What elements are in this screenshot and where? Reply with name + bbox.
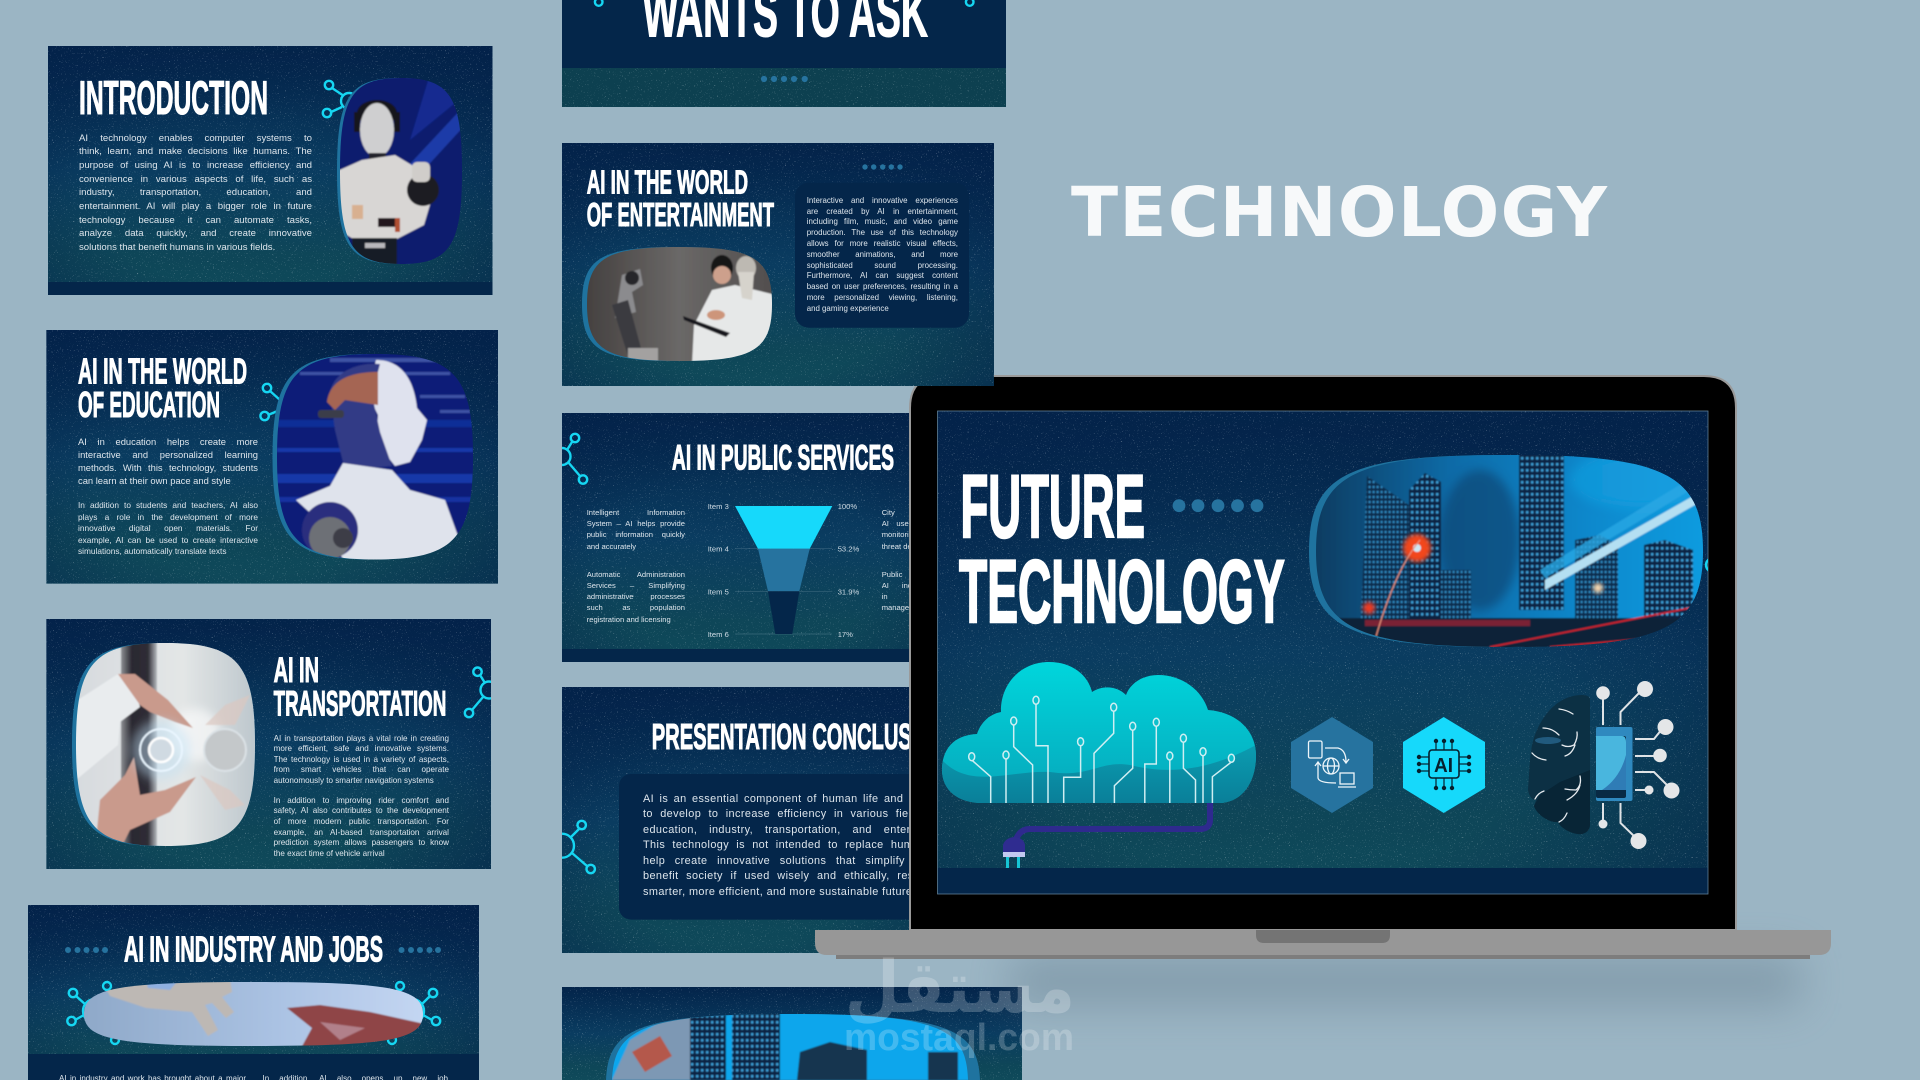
text block: transportation first paragraph: more efficient, safe and innovative systems.	[274, 744, 449, 753]
icon: connector stub	[1704, 558, 1708, 572]
callout: conclusion text box: This technology is not intended to replace humans, but	[643, 839, 959, 851]
heading: AI in transportation: AI IN	[274, 651, 319, 690]
text block: right services: AI used to monitor	[882, 519, 960, 528]
photo: white robot	[340, 78, 462, 264]
photo: robot and human hands	[84, 982, 423, 1046]
callout: entertainment text box: smoother animations, and more	[807, 250, 958, 259]
callout: entertainment text box: are created by AI in entertainment,	[807, 207, 958, 216]
dots: title marker	[1173, 499, 1263, 512]
callout: entertainment text box: more personalized viewing, listening,	[807, 293, 958, 302]
panel: introduction slide	[48, 46, 492, 295]
icon: network devices hexagon	[1291, 717, 1373, 813]
callout: entertainment text box: Interactive and innovative experiences	[807, 196, 958, 205]
text block: transportation first paragraph: AI in transportation plays a vital role in creating	[274, 734, 449, 743]
callout: conclusion text box: smarter, more efficient, and more sustainable future.	[643, 886, 916, 898]
callout: conclusion text box: AI is an essential component of human life and continues	[643, 793, 959, 805]
text block: right services: threat detection	[882, 542, 934, 551]
text block: left services: registration and licensing	[587, 615, 671, 624]
icon: left connector	[67, 982, 119, 1044]
icon: right connector	[388, 982, 440, 1044]
text block: right services: City Security –	[882, 508, 960, 517]
text block: education first paragraph: interactive and personalized learning	[78, 449, 258, 460]
text block: introduction body: analyze data quickly, and create innovative	[79, 228, 312, 239]
text block: left services: such as population	[587, 603, 685, 612]
text block: introduction body: AI technology enables computer systems to	[79, 133, 312, 144]
callout: conclusion text box: help create innovative solutions that simplify life and	[643, 855, 959, 867]
text block: education first paragraph: AI in education helps create more	[78, 436, 258, 447]
heading: AI in the world of education: OF EDUCATION	[78, 384, 220, 425]
text block: right services: management	[882, 603, 926, 612]
funnel chart: Item 5	[708, 587, 729, 596]
callout: entertainment text box: based on user preferences, resulting in a	[807, 282, 958, 291]
callout: entertainment text box	[795, 183, 969, 328]
shadow: laptop ground shadow	[1010, 958, 1800, 1004]
heading: AI in the world of entertainment: OF ENTERTAINMENT	[587, 196, 774, 233]
icon: network connector	[562, 432, 588, 485]
callout: entertainment text box: production. The use of this technology	[807, 228, 958, 237]
funnel chart: 53.2%	[838, 545, 859, 554]
text block: introduction body: convenience in various aspects of life, such as	[79, 174, 312, 185]
callout: entertainment text box: allows for more realistic visual effects,	[807, 239, 958, 248]
heading: introduction: INTRODUCTION	[79, 71, 268, 124]
text block: transportation second paragraph	[274, 796, 449, 861]
text block: education first paragraph: methods. With this technology, students	[78, 462, 258, 473]
heading: AI in the world of education	[78, 350, 247, 425]
icon: circuit cloud with plug	[942, 662, 1256, 868]
laptop: base	[815, 930, 1831, 955]
heading: presentation conclusion: PRESENTATION CONCLUSION	[652, 716, 948, 757]
icon: network connector	[562, 820, 596, 874]
panel: AI in entertainment slide	[562, 143, 994, 386]
photo: night city skyline	[1309, 450, 1710, 650]
text block: introduction body: purpose of using AI is to increase efficiency and	[79, 160, 312, 171]
text block: transportation second paragraph: example, an AI-based transportation arrival	[274, 828, 449, 837]
text block: transportation first paragraph: The technology is used in a variety of aspects,	[274, 755, 449, 764]
heading: AI in the world of education: AI IN THE WORLD	[78, 350, 247, 392]
callout: conclusion text box	[619, 774, 959, 920]
funnel chart: Item 6	[708, 630, 729, 639]
text block: education second paragraph: In addition to students and teachers, AI also	[78, 500, 258, 510]
text block: introduction body: think, learn, and make decisions like humans. The	[79, 146, 312, 157]
funnel chart: Item 4	[708, 545, 729, 554]
text block: introduction body: industry, transportation, education, and	[79, 187, 312, 198]
icon: network connector	[323, 81, 357, 117]
funnel chart: Item 3	[708, 502, 729, 511]
text block: introduction body: entertainment. AI will play a bigger role in future	[79, 201, 312, 212]
text block: left services	[587, 507, 685, 627]
text block: transportation second paragraph: safety, AI also contributes to the development	[274, 806, 449, 815]
laptop: notch	[1256, 930, 1390, 943]
callout: entertainment text box: sophisticated sound processing.	[807, 261, 958, 270]
text block: introduction body: technology because it can automate tasks,	[79, 215, 312, 226]
heading: future technology: TECHNOLOGY	[959, 541, 1285, 641]
callout: conclusion text box: benefit society if used wisely and ethically, resulting in	[643, 870, 959, 882]
heading: future technology: FUTURE	[960, 456, 1145, 556]
heading: AI in transportation	[274, 651, 446, 724]
watermark: mostaql: مستقل	[845, 945, 1075, 1029]
panel: AI in public services slide	[562, 413, 909, 662]
heading: AI in industry and jobs: AI IN INDUSTRY AND JOBS	[124, 929, 383, 970]
panel: closing city slide	[562, 987, 1022, 1080]
callout: conclusion text box: education, industry, transportation, and entertainment.	[643, 824, 959, 836]
dots: slide marker	[862, 164, 903, 170]
text block: transportation second paragraph: of more modern public transportation. For	[274, 817, 449, 826]
text block: left services: Services – Simplifying	[587, 581, 685, 590]
text block: left services: and accurately	[587, 542, 636, 551]
text block: education second paragraph: plays a role in the development of more	[78, 512, 258, 522]
text block: left services: System – AI helps provide	[587, 519, 685, 528]
callout: entertainment text box: and gaming experience	[807, 304, 889, 313]
panel: presentation conclusion slide	[562, 687, 909, 953]
photo: blue city skyline	[612, 1014, 968, 1080]
text block: right services: Public Transport –	[882, 570, 960, 579]
icon: AI chip hexagon	[1403, 717, 1485, 813]
panel: future technology screen	[938, 411, 1720, 894]
panel: AI in industry and jobs slide	[28, 905, 479, 1080]
text block: education first paragraph: can learn at their own pace and style	[78, 475, 231, 486]
text block: right services	[882, 507, 960, 627]
text block: right services: AI increases use	[882, 581, 960, 590]
icon: network connector	[260, 384, 280, 420]
icon: AI chip hexagon: AI	[1434, 755, 1453, 777]
text block: introduction body	[79, 132, 312, 257]
laptop mockup	[815, 376, 1831, 959]
laptop: screen bezel	[910, 376, 1736, 930]
laptop: base shadow strip	[836, 955, 1810, 959]
text block: introduction body: solutions that benefit humans in various fields.	[79, 242, 275, 253]
text block: education second paragraph	[78, 500, 258, 558]
text block: education first paragraph	[78, 435, 258, 489]
icon: AI brain and chip	[1528, 681, 1680, 849]
text block: left services: public information quickly	[587, 530, 685, 539]
watermark: mostaql: mostaql.com	[844, 1017, 1074, 1059]
heading: AI in the world of entertainment	[587, 163, 774, 233]
funnel chart	[708, 502, 859, 639]
panel: AI in education slide	[46, 330, 498, 584]
text block: industry body columns	[59, 1073, 448, 1080]
text block: transportation second paragraph: In addition to improving rider comfort and	[274, 796, 449, 805]
heading: future technology	[959, 456, 1285, 641]
text block: left services: administrative processes	[587, 592, 685, 601]
funnel chart: 31.9%	[838, 587, 859, 596]
watermark: mostaql	[844, 945, 1075, 1059]
heading: AI in the world of entertainment: AI IN THE WORLD	[587, 163, 748, 200]
photo: robot head profile	[272, 350, 476, 562]
text block: left services: Automatic Administration	[587, 570, 685, 579]
icon: connector stubs	[595, 0, 974, 6]
panel: wants to ask slide	[562, 0, 1006, 107]
text block: transportation first paragraph: from smart vehicles that can operate	[274, 765, 449, 774]
funnel chart: 100%	[838, 502, 857, 511]
text block: right services: in transportation	[882, 592, 960, 601]
text block: left services: Intelligent Information	[587, 508, 685, 517]
main heading: technology: TECHNOLOGY	[1071, 173, 1608, 253]
dots: right row	[398, 947, 441, 953]
text block: right services: monitoring and	[882, 530, 960, 539]
text block: education second paragraph: example, AI can be used to create interactive	[78, 535, 258, 545]
callout: conclusion text box: to develop to increase efficiency in various fields, such	[643, 808, 959, 820]
text block: transportation first paragraph	[274, 734, 449, 788]
callout: entertainment text box: including film, music, and video game	[807, 217, 958, 226]
text block: transportation second paragraph: prediction system allows passengers to know	[274, 838, 449, 847]
callout: entertainment text box: Furthermore, AI can suggest content	[807, 271, 958, 280]
photo: scientists and robot arm	[587, 247, 772, 361]
photo: hands holding hologram	[70, 640, 258, 850]
dots: slide marker	[761, 76, 808, 82]
text block: transportation first paragraph: autonomously to smarter navigation systems	[274, 776, 434, 785]
panel: AI in transportation slide	[46, 619, 498, 869]
funnel chart: 17%	[838, 630, 853, 639]
heading: AI in transportation: TRANSPORTATION	[274, 685, 446, 724]
text block: transportation second paragraph: the exact time of vehicle arrival	[274, 849, 385, 858]
text block: education second paragraph: simulations, automatically translate texts	[78, 546, 226, 556]
icon: network connector	[464, 666, 491, 718]
dots: left row	[65, 947, 108, 953]
heading: AI in public services: AI IN PUBLIC SERVICES	[672, 439, 894, 478]
text block: education second paragraph: innovative digital open materials. For	[78, 523, 258, 533]
